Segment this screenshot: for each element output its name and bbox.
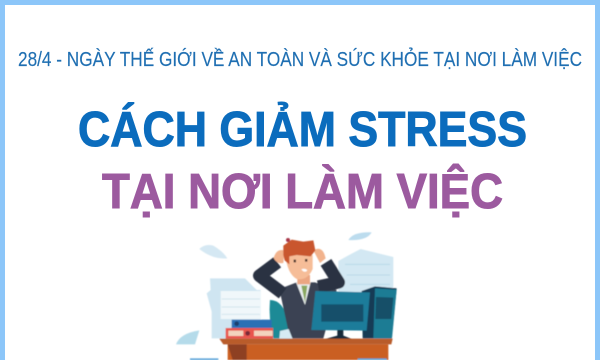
paper stack left highlight [221, 291, 261, 319]
paper bottom [190, 358, 387, 360]
desk top [219, 339, 393, 344]
monitor [311, 291, 370, 331]
paper stack left [207, 278, 261, 338]
shirt and tie [296, 282, 311, 305]
desk body [228, 344, 388, 360]
left arm [259, 262, 283, 293]
illustration: stressed office worker at desk [176, 232, 397, 360]
monitor stand [325, 330, 352, 339]
paper under hand [279, 329, 293, 339]
eyes and mouth [294, 259, 307, 262]
blue binder [232, 320, 272, 328]
suit body [279, 282, 337, 338]
chair [270, 300, 288, 338]
paper stack left lines [222, 299, 260, 314]
paper scrap left [176, 330, 199, 344]
stress mark [286, 238, 290, 242]
title line 2: TẠI NƠI LÀM VIỆC [102, 164, 503, 219]
title line 1: CÁCH GIẢM STRESS [78, 102, 527, 157]
right arm [318, 262, 339, 287]
tower computer [362, 286, 397, 338]
cloud left [199, 245, 227, 259]
cloud top right [348, 232, 372, 240]
face [285, 255, 313, 279]
hands [274, 249, 326, 263]
paper stack right lines [345, 264, 390, 284]
hair [283, 240, 315, 264]
neck [297, 275, 310, 284]
paper stack right [338, 249, 393, 293]
red binder [226, 328, 273, 339]
binder labels [228, 331, 273, 336]
